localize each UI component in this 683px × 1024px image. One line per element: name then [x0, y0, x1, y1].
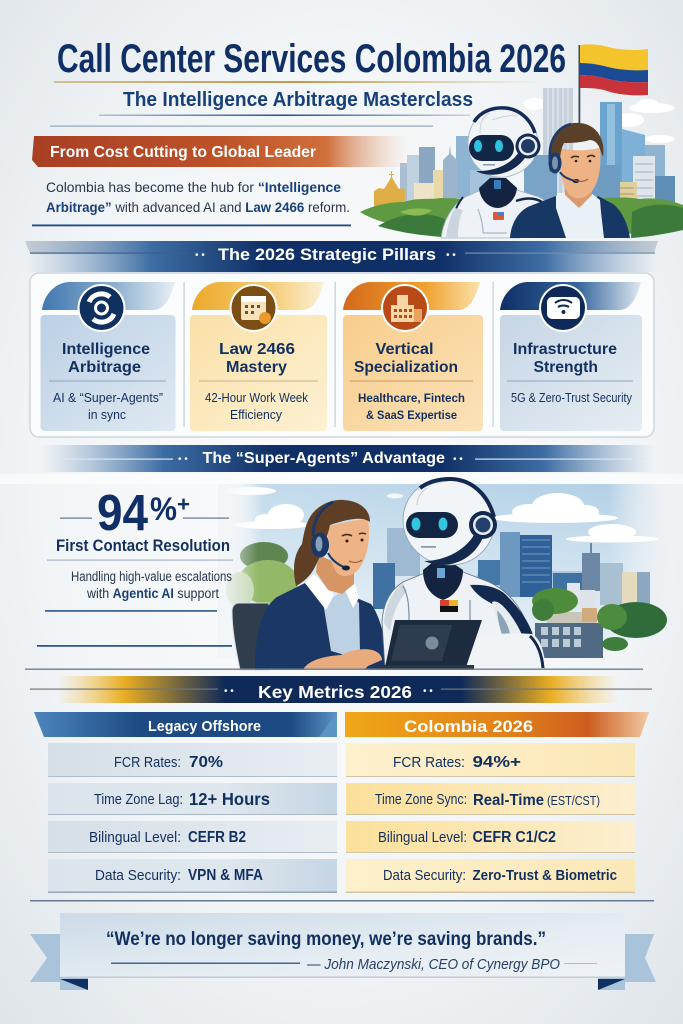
pillar: Intelligence Arbitrage: Intelligence	[62, 341, 150, 358]
text: escalations description: Handling high-value escalations	[71, 569, 232, 584]
low building and trees	[532, 588, 667, 658]
pillar: Law 2466 Mastery: Mastery	[226, 359, 287, 376]
row: FCR Rates: FCR Rates:	[393, 754, 465, 771]
clouds	[523, 98, 675, 143]
row: Time Zone Sync: Time Zone Sync:	[375, 792, 467, 808]
illustration: agent with robot	[0, 474, 683, 670]
row: Bilingual Level: Bilingual Level:	[89, 830, 181, 846]
pillar: Vertical Specialization	[343, 282, 483, 431]
table column: Colombia 2026	[345, 712, 649, 893]
pillar: Intelligence Arbitrage	[40, 282, 176, 431]
sky	[218, 484, 672, 658]
banner: From Cost Cutting to Global Leader: From Cost Cutting to Global Leader	[50, 144, 316, 161]
pillar: Law 2466 Mastery: 42-Hour Work Week	[205, 391, 309, 405]
row: Bilingual Level	[48, 821, 337, 853]
greenery	[360, 197, 683, 237]
office chair	[232, 603, 269, 670]
section heading: The Super-Agents Advantage: • •	[178, 454, 188, 465]
skyline	[374, 88, 675, 217]
row: Data Security: Data Security:	[95, 868, 181, 884]
flag pole	[578, 45, 580, 125]
pillar: Vertical Specialization: & SaaS Expertise	[366, 408, 457, 422]
text: escalations description	[37, 569, 232, 647]
church	[374, 171, 405, 208]
section heading: Key Metrics 2026: • •	[224, 686, 234, 697]
row: Time Zone Lag: 12+ Hours	[189, 789, 270, 809]
text: escalations description: with Agentic AI support	[86, 586, 219, 601]
intro paragraph: Arbitrage” with advanced AI and Law 2466 reform.	[46, 199, 350, 215]
hero illustration: skyline, robot and agent	[360, 44, 683, 238]
quote text: “We’re no longer saving money, we’re saving brands.”	[106, 929, 546, 950]
row: Time Zone Lag: Time Zone Lag:	[94, 792, 183, 808]
section heading: The 2026 Strategic Pillars	[25, 241, 658, 272]
row: Data Security: Zero-Trust & Biometric	[472, 867, 617, 884]
section heading: Key Metrics 2026: • •	[423, 686, 433, 697]
icon: arbitrage cycle	[78, 284, 126, 332]
row: Data Security	[346, 859, 635, 893]
statistic: 94 percent first contact resolution: First Contact Resolution	[56, 537, 230, 555]
ribbon tails	[30, 934, 656, 990]
row: FCR Rates: 70%	[189, 754, 223, 771]
row: Bilingual Level	[346, 821, 635, 853]
row: Data Security	[48, 859, 337, 893]
row: Bilingual Level: Bilingual Level:	[378, 830, 467, 846]
woman agent	[255, 500, 389, 670]
row: FCR Rates	[346, 743, 635, 777]
row: Data Security: Data Security:	[383, 868, 466, 884]
column header	[345, 712, 649, 737]
section heading: Key Metrics 2026: Key Metrics 2026	[258, 682, 412, 702]
pillar: Infrastructure Strength: Infrastructure	[513, 341, 617, 358]
row: FCR Rates: 94%+	[472, 754, 521, 771]
pillar: Intelligence Arbitrage: AI & “Super-Agents”	[53, 391, 163, 405]
section heading: The 2026 Strategic Pillars: • •	[446, 250, 456, 261]
robot assistant	[376, 478, 545, 670]
pillar: Infrastructure Strength: 5G & Zero-Trust Security	[511, 391, 633, 405]
pillar: Vertical Specialization: Specialization	[354, 359, 458, 376]
table column: Legacy Offshore	[34, 712, 337, 893]
call center agent	[510, 123, 630, 238]
row: Bilingual Level: CEFR B2	[188, 829, 246, 846]
laptop	[376, 620, 482, 670]
section heading: The 2026 Strategic Pillars: The 2026 Strategic Pillars	[218, 246, 436, 264]
robot forearm	[470, 633, 545, 668]
pillar: Law 2466 Mastery: Efficiency	[230, 408, 283, 422]
clouds	[224, 487, 658, 542]
statistic: 94 percent first contact resolution: %	[150, 491, 177, 527]
attribution: — John Maczynski, CEO of Cynergy BPO	[306, 957, 560, 973]
icon: wifi	[539, 284, 587, 332]
skyline	[373, 528, 650, 609]
quote banner	[30, 913, 656, 990]
column header	[34, 712, 337, 737]
pillar: Vertical Specialization: Healthcare, Fintech	[358, 391, 465, 405]
row: Time Zone Lag	[48, 783, 337, 815]
trees left	[226, 542, 298, 608]
subtitle: The Intelligence Arbitrage Masterclass	[123, 89, 473, 111]
pillar: Infrastructure Strength	[500, 282, 642, 431]
robot	[441, 108, 552, 238]
section heading: The Super-Agents Advantage: The “Super-Agents” Advantage	[202, 450, 445, 467]
icon: calendar	[230, 284, 278, 332]
icon: office building	[381, 284, 429, 332]
pillar: Vertical Specialization: Vertical	[376, 341, 434, 358]
row: Data Security: VPN & MFA	[188, 867, 263, 884]
column header: Colombia 2026	[404, 717, 533, 736]
intro paragraph: Colombia has become the hub for “Intelligence	[46, 179, 341, 195]
pillar: Infrastructure Strength: Strength	[534, 359, 598, 376]
row: Time Zone Sync: Real-Time	[473, 792, 544, 809]
row: Time Zone Sync: (EST/CST)	[547, 794, 600, 808]
pillar: Law 2466 Mastery	[190, 282, 327, 431]
statistic: 94 percent first contact resolution	[47, 484, 233, 561]
row: FCR Rates	[48, 743, 337, 777]
pillar: Intelligence Arbitrage: Arbitrage	[68, 359, 141, 376]
section heading: The 2026 Strategic Pillars: • •	[195, 250, 205, 261]
row: Bilingual Level: CEFR C1/C2	[472, 829, 556, 846]
section heading: The Super-Agents Advantage: • •	[453, 454, 463, 465]
panel: strategic pillars	[30, 273, 654, 437]
statistic: 94 percent first contact resolution: +	[177, 493, 190, 516]
banner: From Cost Cutting to Global Leader	[32, 136, 410, 167]
column header: Legacy Offshore	[148, 718, 261, 735]
statistic: 94 percent first contact resolution: 94	[97, 484, 149, 541]
pillar: Law 2466 Mastery: Law 2466	[219, 341, 295, 358]
section heading: The Super-Agents Advantage	[40, 445, 655, 472]
flag of Colombia	[580, 44, 648, 95]
row: FCR Rates: FCR Rates:	[114, 755, 181, 771]
section heading: Key Metrics 2026	[30, 676, 652, 703]
intro paragraph	[32, 179, 351, 226]
pillar: Intelligence Arbitrage: in sync	[88, 408, 126, 422]
row: Time Zone Sync	[346, 783, 635, 815]
